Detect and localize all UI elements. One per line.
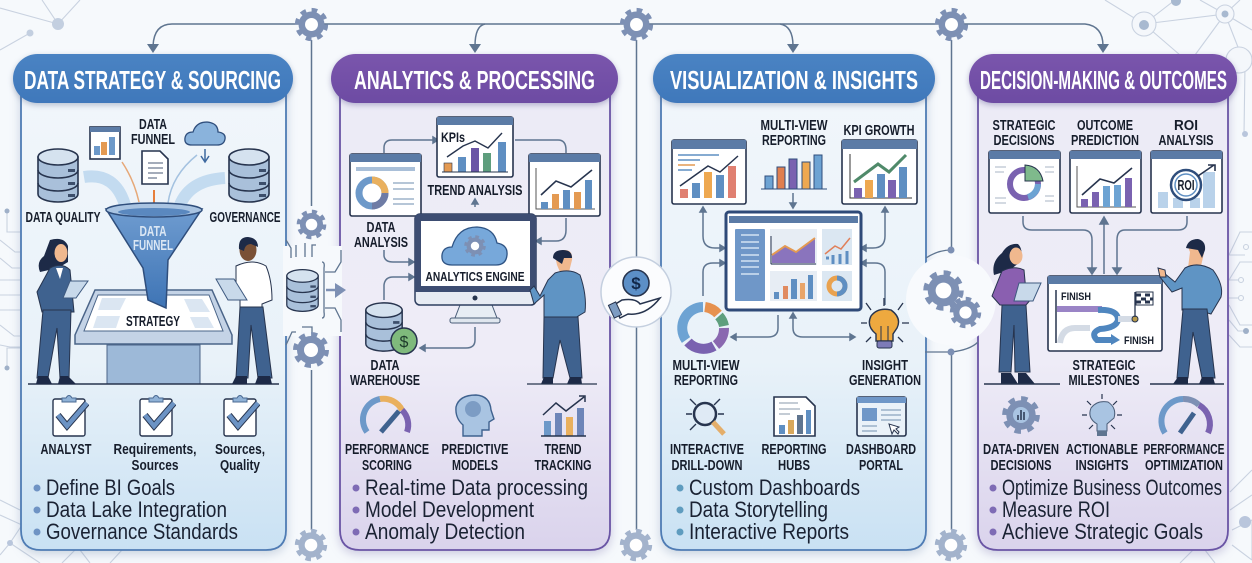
label: data analysis: [354, 220, 408, 251]
panel 2 bullet list: Anomaly Detection: [365, 519, 525, 544]
connector hub: dollar and hand: [601, 257, 671, 327]
person: woman with tablet: [36, 239, 88, 384]
label: data funnel top: DATA: [139, 117, 167, 133]
gear: bottom 2: [622, 531, 650, 559]
labels under visualization icons: REPORTING: [762, 442, 826, 458]
database right: [229, 149, 269, 202]
labels under visualization icons: [670, 442, 916, 474]
panel 3 bullet list: Custom Dashboards: [689, 475, 860, 500]
label: strategic milestones: MILESTONES: [1068, 373, 1140, 389]
KPI growth window: [842, 140, 917, 204]
chart window: [90, 127, 120, 159]
data streams: [84, 155, 225, 210]
labels: multi-view reporting and insight generation: GENERATION: [849, 373, 921, 389]
monitor: analytics engine: ANALYTICS ENGINE: [426, 270, 524, 284]
icon: performance gauge: [1161, 399, 1210, 433]
labels under decision icons: ACTIONABLE: [1066, 442, 1138, 458]
labels under decision icons: [983, 442, 1225, 474]
labels above decision windows: PREDICTION: [1071, 133, 1139, 149]
labels above decision windows: ROI: [1174, 118, 1198, 134]
panel 1 bullet list: Define BI Goals: [46, 475, 175, 500]
label: strategic milestones: STRATEGIC: [1072, 358, 1136, 374]
ground lines: [984, 383, 1224, 385]
report chart window: [672, 140, 746, 204]
labels above decision windows: OUTCOME: [1077, 118, 1133, 134]
ground line: [28, 383, 279, 385]
funnel: [106, 203, 202, 308]
funnel: DATA: [140, 224, 167, 240]
labels under analytics icons: PREDICTIVE: [442, 442, 509, 458]
database left: [38, 149, 78, 202]
gear: top 1: [297, 10, 326, 39]
panel 2 bullet list: Real-time Data processing: [365, 475, 588, 500]
label: data analysis: DATA: [366, 220, 396, 236]
data warehouse: WAREHOUSE: [350, 373, 420, 389]
gear: bottom 3: [937, 531, 965, 559]
strategy table: STRATEGY: [126, 314, 180, 330]
labels above decision windows: DECISIONS: [994, 133, 1055, 149]
label: strategic milestones: [1068, 358, 1140, 389]
labels under checklist icons: Sources,: [215, 442, 265, 458]
central dashboard: [726, 212, 861, 310]
panel 4 bullet list: [990, 475, 1222, 544]
panel 4 icons and labels: [983, 394, 1225, 474]
labels under visualization icons: DASHBOARD: [846, 442, 916, 458]
labels under analytics icons: TRACKING: [534, 458, 592, 474]
labels under visualization icons: INTERACTIVE: [670, 442, 744, 458]
labels under analytics icons: PERFORMANCE: [345, 442, 429, 458]
labels above decision windows: [992, 118, 1214, 149]
panel 2 header: ANALYTICS & PROCESSING: [354, 67, 595, 95]
icon: dashboard portal: [857, 397, 906, 436]
labels above decision windows: STRATEGIC: [992, 118, 1056, 134]
data warehouse: DATA: [370, 358, 400, 374]
labels under analytics icons: MODELS: [452, 458, 498, 474]
label: trend analysis: TREND ANALYSIS: [428, 183, 523, 199]
panel 2 bullet list: [352, 475, 588, 544]
panel 3 bullet list: [676, 475, 860, 544]
background network: top right: [1105, 0, 1252, 137]
panel 3 header: VISUALIZATION & INSIGHTS: [670, 67, 918, 95]
outcome prediction window: [1070, 151, 1141, 213]
flow arrows: [700, 193, 888, 340]
panel 2 bullet list: Model Development: [365, 497, 534, 522]
panel 1 header: [13, 54, 293, 103]
panel 3 icons and labels: [670, 397, 916, 474]
panel 2 icons and labels: [345, 395, 592, 474]
panel 4 body: decision making: [978, 78, 1228, 550]
panel 3 bullet list: Data Storytelling: [689, 497, 828, 522]
panel 2 illustration: analytics engine: [350, 117, 600, 389]
ROI window: [1151, 151, 1222, 213]
document icon: [142, 151, 168, 184]
monitor: analytics engine: [415, 214, 536, 323]
donut chart window: [350, 154, 421, 216]
panel 1 icons and labels: [40, 396, 265, 474]
connector hub: gears: [906, 246, 996, 356]
panel 1 body: data strategy: [21, 78, 286, 550]
labels under checklist icons: Sources: [132, 458, 178, 474]
data warehouse: [350, 303, 420, 389]
icon: data-driven gear: [1005, 399, 1037, 431]
icon: sources checklist: [224, 396, 258, 436]
labels: multi-view reporting and insight generation: [672, 358, 921, 389]
labels under visualization icons: DRILL-DOWN: [672, 458, 742, 474]
label: multi-view reporting top: [760, 118, 828, 149]
circuit traces: left: [0, 208, 20, 370]
labels under checklist icons: Requirements,: [114, 442, 196, 458]
panel 1 illustration: funnel scene: [26, 117, 281, 384]
icon: trend tracking: [541, 396, 586, 436]
labels under visualization icons: PORTAL: [859, 458, 903, 474]
strategic decisions window: [989, 151, 1060, 213]
label: data analysis: ANALYSIS: [354, 235, 408, 251]
connector hub: database between panels 1 and 2: [283, 212, 346, 366]
labels: data quality and governance: DATA QUALITY: [26, 210, 101, 226]
labels under analytics icons: TREND: [544, 442, 582, 458]
background network: top left: [0, 0, 80, 50]
labels under analytics icons: SCORING: [362, 458, 412, 474]
panel 4 bullet list: Measure ROI: [1002, 497, 1110, 522]
label: multi-view reporting top: MULTI-VIEW: [760, 118, 828, 134]
data warehouse: $: [400, 334, 409, 351]
icon: head with network: [456, 395, 494, 436]
panel 1 header: DATA STRATEGY & SOURCING: [24, 67, 281, 95]
flow arrows: [1023, 216, 1187, 274]
icon: actionable lightbulb: [1082, 394, 1122, 436]
panel 2 header: [331, 54, 618, 103]
background network: bottom right: [1180, 470, 1252, 563]
person: presenter: [1158, 239, 1222, 384]
labels above decision windows: ANALYSIS: [1158, 133, 1214, 149]
label: KPI growth: KPI GROWTH: [844, 123, 914, 139]
cloud icon: [185, 122, 225, 162]
lightbulb icon: [861, 298, 909, 348]
label: data funnel top: FUNNEL: [131, 132, 175, 148]
milestone window: FINISH: [1124, 335, 1154, 347]
labels: data quality and governance: GOVERNANCE: [210, 210, 281, 226]
ROI window: ROI: [1178, 178, 1194, 194]
circuit traces: right: [1229, 232, 1252, 347]
strategy table: [75, 290, 232, 384]
gear: top 3: [937, 10, 966, 39]
labels under decision icons: DECISIONS: [990, 458, 1052, 474]
icon: report document: [774, 397, 815, 436]
milestone window: FINISH: [1061, 291, 1091, 303]
gear: top 2: [622, 10, 651, 39]
growth chart window: [529, 154, 600, 216]
icon: requirements checklist: [140, 396, 174, 436]
KPI chart window: [437, 117, 513, 177]
panel 3 body: visualization: [661, 78, 926, 550]
gear: bottom 1: [297, 531, 325, 559]
labels: data quality and governance: [26, 210, 281, 226]
labels: multi-view reporting and insight generation: INSIGHT: [862, 358, 908, 374]
connector lines and arrows along the top: [147, 24, 1109, 530]
panel 4 illustration: decisions: [984, 118, 1224, 389]
icon: analyst checklist: [53, 396, 87, 436]
panel 3 bullet list: Interactive Reports: [689, 519, 849, 544]
icon: magnifier drill-down: [686, 399, 724, 434]
label: data funnel top: [131, 117, 175, 148]
person: woman with tablet: [992, 244, 1041, 384]
icon: gauge: [363, 399, 408, 432]
background network: bottom left: [0, 500, 122, 563]
labels under analytics icons: [345, 442, 592, 474]
panel 4 bullet list: Achieve Strategic Goals: [1002, 519, 1203, 544]
labels under decision icons: OPTIMIZATION: [1145, 458, 1223, 474]
milestone window: [1048, 276, 1162, 351]
panel 1 bullet list: [34, 475, 238, 544]
labels under checklist icons: [40, 442, 265, 474]
connector hub: dollar and hand: $: [631, 274, 641, 293]
panel 3 header: [653, 54, 935, 103]
person: analyst at monitor: [527, 250, 597, 384]
panel 2 body: analytics: [340, 78, 610, 550]
funnel: FUNNEL: [133, 238, 173, 254]
panel 4 header: [969, 54, 1237, 103]
flow arrows: [384, 137, 566, 351]
labels under checklist icons: Quality: [220, 458, 260, 474]
labels: multi-view reporting and insight generation: REPORTING: [674, 373, 738, 389]
panel 1 bullet list: Data Lake Integration: [46, 497, 227, 522]
labels under decision icons: INSIGHTS: [1076, 458, 1129, 474]
person: man with tablet: [216, 237, 272, 384]
bar chart: [761, 155, 827, 189]
KPI chart window: KPIs: [441, 129, 465, 145]
panel 3 illustration: dashboard: [672, 118, 921, 389]
labels under checklist icons: ANALYST: [40, 442, 92, 458]
label: multi-view reporting top: REPORTING: [762, 133, 826, 149]
labels under decision icons: DATA-DRIVEN: [983, 442, 1059, 458]
panel 1 bullet list: Governance Standards: [46, 519, 238, 544]
donut chart: [682, 307, 724, 349]
labels under visualization icons: HUBS: [778, 458, 810, 474]
labels: multi-view reporting and insight generation: MULTI-VIEW: [672, 358, 740, 374]
